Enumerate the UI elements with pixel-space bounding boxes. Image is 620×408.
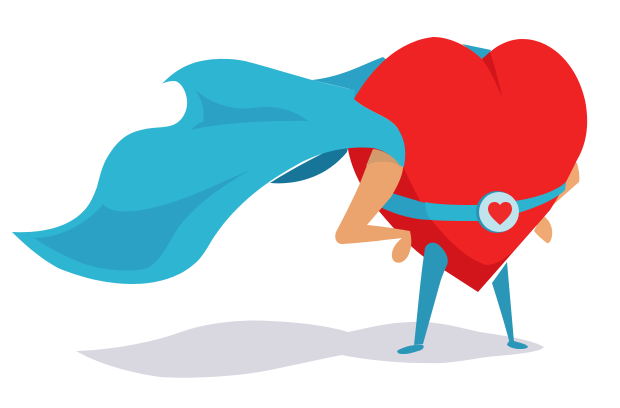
belt left dark (376, 191, 432, 220)
sleeve shadow (366, 149, 402, 169)
belt center (425, 202, 480, 221)
arm skin (335, 150, 411, 263)
cape underside fold (270, 140, 350, 183)
cape upper fold (191, 90, 308, 130)
heart bright front (354, 37, 587, 265)
left foot (397, 345, 424, 354)
left leg (414, 243, 448, 345)
ground shadow (76, 320, 544, 378)
cape sliver between heart lobes (462, 44, 491, 62)
belt right (515, 182, 566, 214)
heart crease (482, 52, 502, 98)
cape (12, 59, 405, 284)
right arm behind heart (534, 160, 579, 243)
buckle heart (488, 202, 512, 225)
belt (376, 182, 566, 221)
left arm (335, 149, 411, 263)
right leg (492, 262, 514, 344)
back of cape behind heart (312, 57, 400, 102)
heart dark body (347, 120, 550, 292)
right foot (507, 340, 528, 349)
buckle (476, 191, 519, 233)
cape lower fold (34, 170, 250, 271)
cape main (12, 59, 405, 284)
